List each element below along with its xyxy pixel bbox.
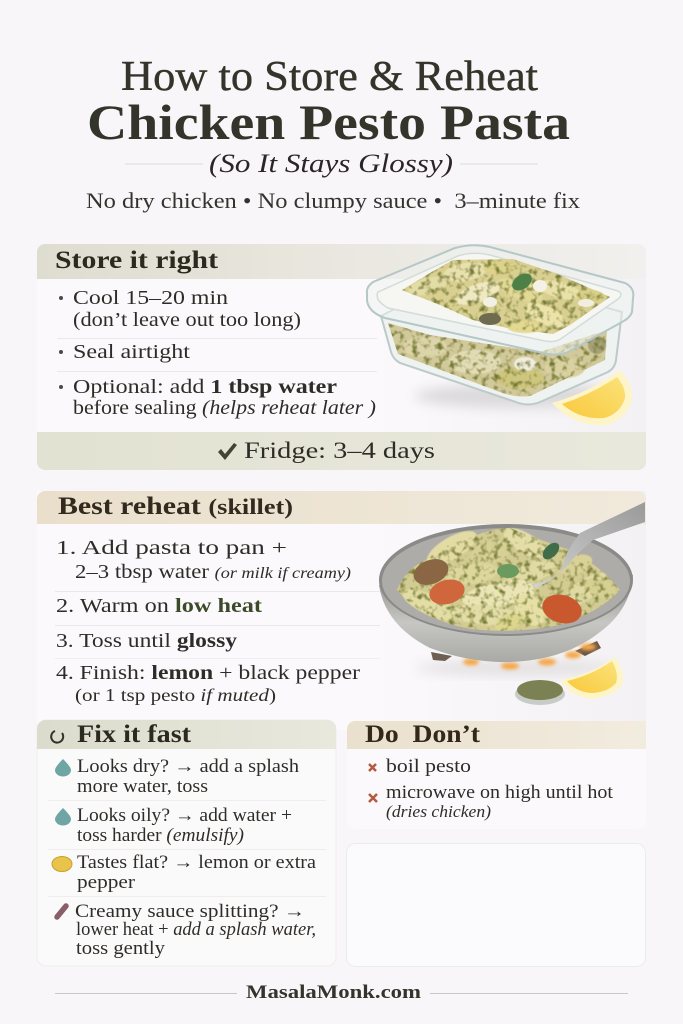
text: cool step [59,287,301,331]
heading: store it right: Store it right [55,247,219,274]
text: cool step: (don’t leave out too long) [73,309,301,331]
tip: looks oily: Looks oily? → add water + [77,806,292,826]
tip: creamy sauce splitting [57,902,316,959]
text: optional step: before sealing (helps reheat later ) [73,397,376,419]
tip: looks oily [55,806,292,846]
title: Chicken Pesto Pasta [87,94,570,150]
item: microwave [369,783,614,821]
text: seal step: Seal airtight [73,341,191,363]
lemon wedge and spice bowl [515,657,623,705]
text: cool step: Cool 15–20 min [73,287,228,309]
footer: MasalaMonk.com [246,982,421,1003]
panel: do and don't [347,721,646,829]
empty panel [346,844,646,966]
panel: store it right [37,244,646,470]
image: skillet with pasta over flame [379,502,645,705]
tip: looks dry: more water, toss [77,777,208,797]
tip: looks dry [55,757,299,797]
panel: best reheat [37,491,646,730]
tip: creamy sauce splitting: Creamy sauce splitting? → [75,902,305,922]
panel: fix it fast [37,720,336,966]
spoon [532,502,645,588]
text: step 1: 2–3 tbsp water (or milk if creamy) [75,561,351,583]
item: microwave: (dries chicken) [386,802,491,821]
text: step 2: 2. Warm on low heat [56,595,262,617]
tip: creamy sauce splitting: toss gently [76,939,166,959]
heading: best reheat: Best reheat (skillet) [58,493,293,520]
text: step 4: 4. Finish: lemon + black pepper [56,662,360,684]
item: boil pesto: boil pesto [386,757,471,777]
callout: fridge time: Fridge: 3–4 days [244,438,435,463]
text: optional step [59,376,376,419]
text: step 3: 3. Toss until glossy [56,630,237,652]
subtitle: (So It Stays Glossy) [209,149,453,178]
tip: creamy sauce splitting: lower heat + add a splash water, [76,920,316,940]
tip: looks dry: Looks dry? → add a splash [77,757,299,777]
text: step 4: (or 1 tsp pesto if muted ) [75,685,276,705]
text: step 1: 1. Add pasta to pan + [56,537,287,559]
item: microwave: microwave on high until hot [386,783,614,803]
text: step 4 [56,662,360,705]
title [87,54,570,150]
heading: do don't: Do Don’t [365,721,481,748]
tagline: No dry chicken • No clumpy sauce • 3–minute fix [86,188,580,213]
burner and flames [431,641,601,670]
tip: tastes flat: pepper [77,873,135,893]
title: How to Store & Reheat [121,54,538,100]
image: glass container with pasta and lemon [367,245,633,425]
lemon wedge [552,370,632,425]
heading: fix it fast: Fix it fast [77,721,192,748]
tip: tastes flat: Tastes flat? → lemon or extra [77,853,316,873]
tip: tastes flat [52,853,316,893]
text: optional step: Optional: add 1 tbsp water [73,376,337,398]
tip: looks oily: toss harder (emulsify) [77,826,244,846]
text: step 1 [56,537,351,583]
